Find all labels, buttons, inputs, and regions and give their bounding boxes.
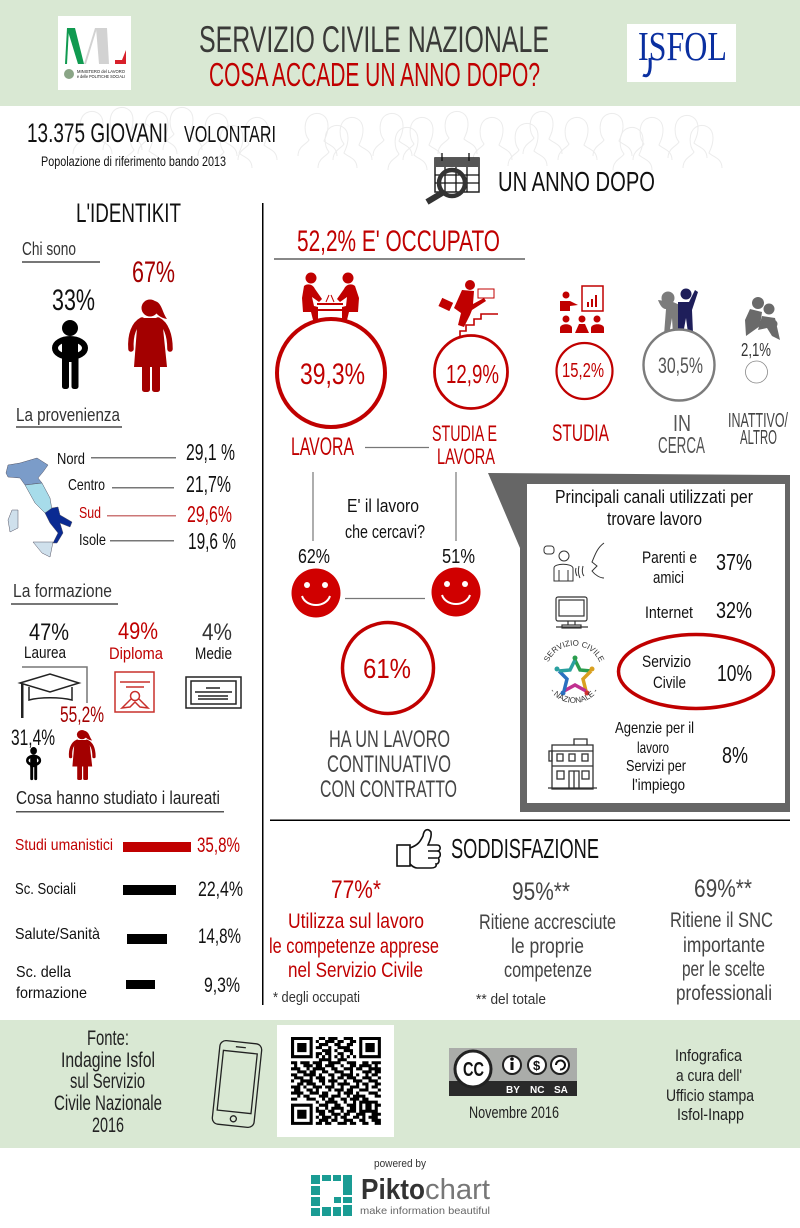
list: provenance by area: 29,1 %: [186, 439, 235, 465]
row: agenzie per il lavoro: Servizi per: [626, 758, 687, 775]
logo: Ministero del Lavoro: e delle POLITICHE SOCIALI: [77, 74, 125, 79]
stat: 77% competenze: nel Servizio Civile: [288, 959, 423, 982]
caption: lavoro continuativo: [320, 726, 457, 803]
stat: 95% competenze: [479, 878, 616, 982]
credits text: [666, 1046, 754, 1124]
badge: creative commons by-nc-sa: $: [533, 1058, 541, 1073]
source text: Civile Nazionale: [54, 1092, 162, 1115]
source text: sul Servizio: [70, 1070, 145, 1093]
credits text: Isfol-Inapp: [677, 1105, 744, 1124]
stat: diploma 49%: 49%: [118, 618, 158, 645]
stat circle: in cerca 30,5%: [644, 330, 714, 458]
row: agenzie per il lavoro: lavoro: [637, 740, 669, 757]
subheading: la provenienza: La provenienza: [16, 405, 121, 425]
smiley: 51%: [432, 546, 480, 616]
title: SERVIZIO CIVILE NAZIONALE: [199, 19, 549, 60]
header band: [0, 0, 800, 106]
badge: creative commons by-nc-sa: NC: [530, 1085, 544, 1096]
piktochart branding: powered by: [374, 1158, 426, 1170]
icon: medie certificate: [186, 677, 241, 708]
logo: Ministero del Lavoro: [58, 16, 131, 90]
row: parenti e amici: Parenti e: [642, 548, 697, 567]
stat: laureati men 31,4%: [11, 725, 55, 780]
headline: 13.375 giovani volontari: Popolazione di riferimento bando 2013: [41, 154, 226, 169]
bar chart: fields of study: Salute/Sanità: [15, 926, 100, 943]
piktochart branding: make information beautiful: [360, 1205, 490, 1217]
stat: 95% competenze: 95%**: [512, 878, 570, 906]
icon: two people at desk: [302, 272, 359, 320]
stat: 95% competenze: Ritiene accresciute: [479, 911, 616, 934]
stat: laureati men 31,4%: 31,4%: [11, 725, 55, 750]
bar chart: fields of study: Sc. della: [16, 964, 71, 981]
subheading: cosa hanno studiato i laureati: Cosa hanno studiato i laureati: [16, 788, 220, 808]
row: agenzie per il lavoro: Agenzie per il: [615, 720, 694, 737]
headline: 13.375 giovani volontari: VOLONTARI: [184, 121, 276, 147]
badge: creative commons by-nc-sa: CC: [463, 1059, 484, 1081]
list: provenance by area: [57, 439, 236, 554]
stat: 69% scelte professionali: Ritiene il SNC: [670, 909, 773, 932]
icon: office building: [548, 739, 597, 789]
icon: woman climbing stairs: [438, 280, 498, 337]
stat: 69% scelte professionali: [670, 875, 773, 1005]
stat circle: in cerca 30,5%: 30,5%: [658, 353, 703, 378]
row: internet: [645, 597, 752, 623]
stat circle: studia e lavora 12,9%: [432, 336, 508, 469]
source text: 2016: [92, 1114, 124, 1137]
highlight: servizio civile 10%: [618, 634, 774, 708]
list: provenance by area: Isole: [79, 532, 106, 549]
heading: 52,2% occupato: 52,2% E' OCCUPATO: [297, 225, 500, 258]
stat: 77% competenze: le competenze apprese: [269, 935, 439, 958]
icon: graduation cap: [20, 667, 87, 718]
piktochart branding: [311, 1158, 490, 1217]
piktochart branding: chart: [425, 1174, 490, 1206]
source text: Indagine Isfol: [61, 1049, 155, 1072]
stat: 77% competenze: [269, 876, 439, 982]
stat: laurea 47%: 47%: [29, 619, 69, 646]
icon: smartphone: [212, 1040, 262, 1128]
stat: 69% scelte professionali: importante: [683, 934, 765, 957]
panel: identikit: [6, 198, 243, 1002]
list: provenance by area: Centro: [68, 477, 105, 494]
logo: servizio civile nazionale: SERVIZIO CIVILE: [544, 640, 604, 662]
stat: diploma 49%: [109, 618, 163, 663]
row: parenti e amici: [642, 548, 752, 587]
stat circle: in cerca 30,5%: CERCA: [658, 432, 705, 458]
stat circle: inattivo 2,1%: [728, 340, 788, 449]
panel: un anno dopo results: [274, 225, 788, 803]
stat: 69% scelte professionali: professionali: [676, 982, 772, 1005]
stat circle: in cerca 30,5%: IN: [673, 410, 691, 436]
subheading: la formazione: La formazione: [13, 581, 112, 601]
divider: [270, 820, 790, 821]
crowd background outlines: [73, 107, 722, 170]
source text: [54, 1027, 162, 1137]
stat: men 33%: 33%: [52, 284, 95, 317]
icon: word of mouth: [544, 543, 604, 581]
logo: servizio civile nazionale: - NAZIONALE -: [552, 690, 596, 703]
icon: calendar with magnifier: [427, 153, 479, 202]
highlight: servizio civile 10%: 10%: [717, 660, 752, 686]
question: e' il lavoro che cercavi: che cercavi?: [345, 522, 425, 542]
headline: 13.375 giovani volontari: [27, 118, 276, 169]
stat: 77% competenze: Utilizza sul lavoro: [288, 910, 424, 933]
date: novembre 2016: Novembre 2016: [469, 1103, 559, 1122]
row: agenzie per il lavoro: l'impiego: [632, 777, 685, 794]
badge: creative commons by-nc-sa: [449, 1048, 577, 1096]
row: agenzie per il lavoro: 8%: [722, 742, 748, 768]
stat: medie 4%: 4%: [202, 619, 232, 646]
logo: Ministero del Lavoro: MINISTERO del LAVORO: [77, 69, 125, 74]
row: internet: 32%: [716, 597, 752, 623]
headline: 13.375 giovani volontari: 13.375 GIOVANI: [27, 118, 168, 148]
highlight: servizio civile 10%: Servizio: [642, 652, 691, 671]
stat circle: 61%: [342, 622, 434, 714]
icon: computer monitor: [556, 597, 588, 628]
title: [199, 19, 549, 93]
panel: canali per trovare lavoro: [488, 473, 790, 812]
heading: un anno dopo: UN ANNO DOPO: [498, 166, 655, 197]
stat: medie 4%: [195, 619, 232, 663]
footer band: [0, 1020, 800, 1148]
stat circle: lavora 39,3%: 39,3%: [300, 358, 365, 391]
badge: creative commons by-nc-sa: SA: [554, 1085, 568, 1096]
bar chart: fields of study: [15, 834, 243, 1002]
stat circle: studia 15,2%: [552, 343, 612, 447]
connector lines: [313, 448, 456, 598]
title: COSA ACCADE UN ANNO DOPO?: [209, 56, 540, 93]
smiley: 62%: [292, 546, 340, 618]
panel title: Principali canali utilizzati per: [555, 487, 753, 507]
question: e' il lavoro che cercavi: [345, 496, 425, 542]
note: degli occupati: * degli occupati: [273, 989, 360, 1006]
smiley: 51%: 51%: [442, 546, 475, 568]
row: parenti e amici: 37%: [716, 549, 752, 575]
stat: medie 4%: Medie: [195, 644, 232, 663]
bar chart: fields of study: 22,4%: [198, 878, 243, 901]
row: agenzie per il lavoro: [615, 720, 748, 794]
stat circle: studia 15,2%: 15,2%: [562, 360, 604, 382]
bar chart: fields of study: 9,3%: [204, 974, 240, 997]
bar chart: fields of study: 14,8%: [198, 925, 241, 948]
stat: laureate women 55,2%: [60, 702, 104, 780]
panel: soddisfazione: [269, 830, 773, 1008]
credits text: Ufficio stampa: [666, 1086, 754, 1105]
map: Italy: [6, 458, 72, 557]
stat: diploma 49%: Diploma: [109, 644, 163, 663]
stat: 95% competenze: competenze: [504, 959, 592, 982]
stat: 69% scelte professionali: per le scelte: [682, 958, 765, 981]
credits text: Infografica: [675, 1046, 742, 1065]
stat: laurea 47%: [24, 619, 69, 662]
list: provenance by area: Nord: [57, 451, 85, 468]
icon: two people embracing: [658, 288, 698, 335]
question: e' il lavoro che cercavi: E' il lavoro: [347, 496, 419, 516]
bar chart: fields of study: Studi umanistici: [15, 837, 113, 854]
stat: 69% scelte professionali: 69%**: [694, 875, 752, 903]
stat circle: lavora 39,3%: LAVORA: [291, 433, 354, 461]
stat circle: studia e lavora 12,9%: STUDIA E: [432, 421, 497, 446]
logo: Isfol: ISFOL: [638, 23, 727, 69]
list: provenance by area: Sud: [79, 505, 101, 522]
row: internet: Internet: [645, 603, 693, 622]
panel title: trovare lavoro: [607, 509, 702, 529]
list: provenance by area: 29,6%: [187, 501, 232, 527]
stat circle: studia e lavora 12,9%: LAVORA: [437, 444, 495, 469]
callout frame: [488, 473, 790, 812]
piktochart branding: Pikto: [361, 1174, 425, 1206]
icon: classroom presentation: [560, 286, 604, 333]
highlight: servizio civile 10%: Civile: [653, 673, 686, 692]
caption: lavoro continuativo: CONTINUATIVO: [327, 751, 451, 778]
list: provenance by area: 19,6 %: [188, 528, 236, 554]
stat circle: studia 15,2%: STUDIA: [552, 420, 609, 447]
stat: laureate women 55,2%: 55,2%: [60, 702, 104, 727]
note: del totale: ** del totale: [476, 991, 546, 1008]
credits text: a cura dell': [676, 1066, 742, 1085]
heading: l'identikit: L'IDENTIKIT: [76, 198, 181, 228]
subheading: chi sono: Chi sono: [22, 239, 76, 259]
bar chart: fields of study: Sc. Sociali: [15, 881, 76, 898]
icon: inactive group: [745, 297, 780, 340]
logo: servizio civile nazionale: [544, 640, 604, 703]
heading: soddisfazione: SODDISFAZIONE: [451, 833, 599, 864]
bar chart: fields of study: 35,8%: [197, 834, 240, 857]
stat circle: inattivo 2,1%: 2,1%: [741, 340, 771, 360]
source text: Fonte:: [87, 1027, 129, 1050]
caption: lavoro continuativo: HA UN LAVORO: [329, 726, 450, 753]
stat: laurea 47%: Laurea: [24, 643, 66, 662]
panel title: [555, 487, 753, 529]
logo: Isfol: [627, 23, 736, 82]
stat: men 33%: [52, 284, 95, 389]
stat: 77% competenze: 77%*: [331, 876, 381, 904]
stat: women 67%: [131, 256, 175, 392]
icon: thumbs up: [397, 830, 440, 868]
icon: diploma certificate: [115, 672, 154, 712]
qr code: [277, 1025, 394, 1137]
stat circle: lavora 39,3%: [277, 319, 385, 461]
divider: [262, 203, 264, 1005]
caption: lavoro continuativo: CON CONTRATTO: [320, 776, 457, 803]
bar chart: fields of study: formazione: [16, 985, 87, 1002]
stat circle: studia e lavora 12,9%: 12,9%: [446, 359, 499, 389]
stat: women 67%: 67%: [132, 256, 175, 289]
row: parenti e amici: amici: [653, 568, 684, 587]
smiley: 62%: 62%: [298, 546, 330, 568]
list: provenance by area: 21,7%: [186, 471, 231, 497]
badge: creative commons by-nc-sa: BY: [506, 1085, 520, 1096]
stat: 95% competenze: le proprie: [511, 935, 584, 958]
stat circle: 61%: 61%: [363, 653, 411, 684]
